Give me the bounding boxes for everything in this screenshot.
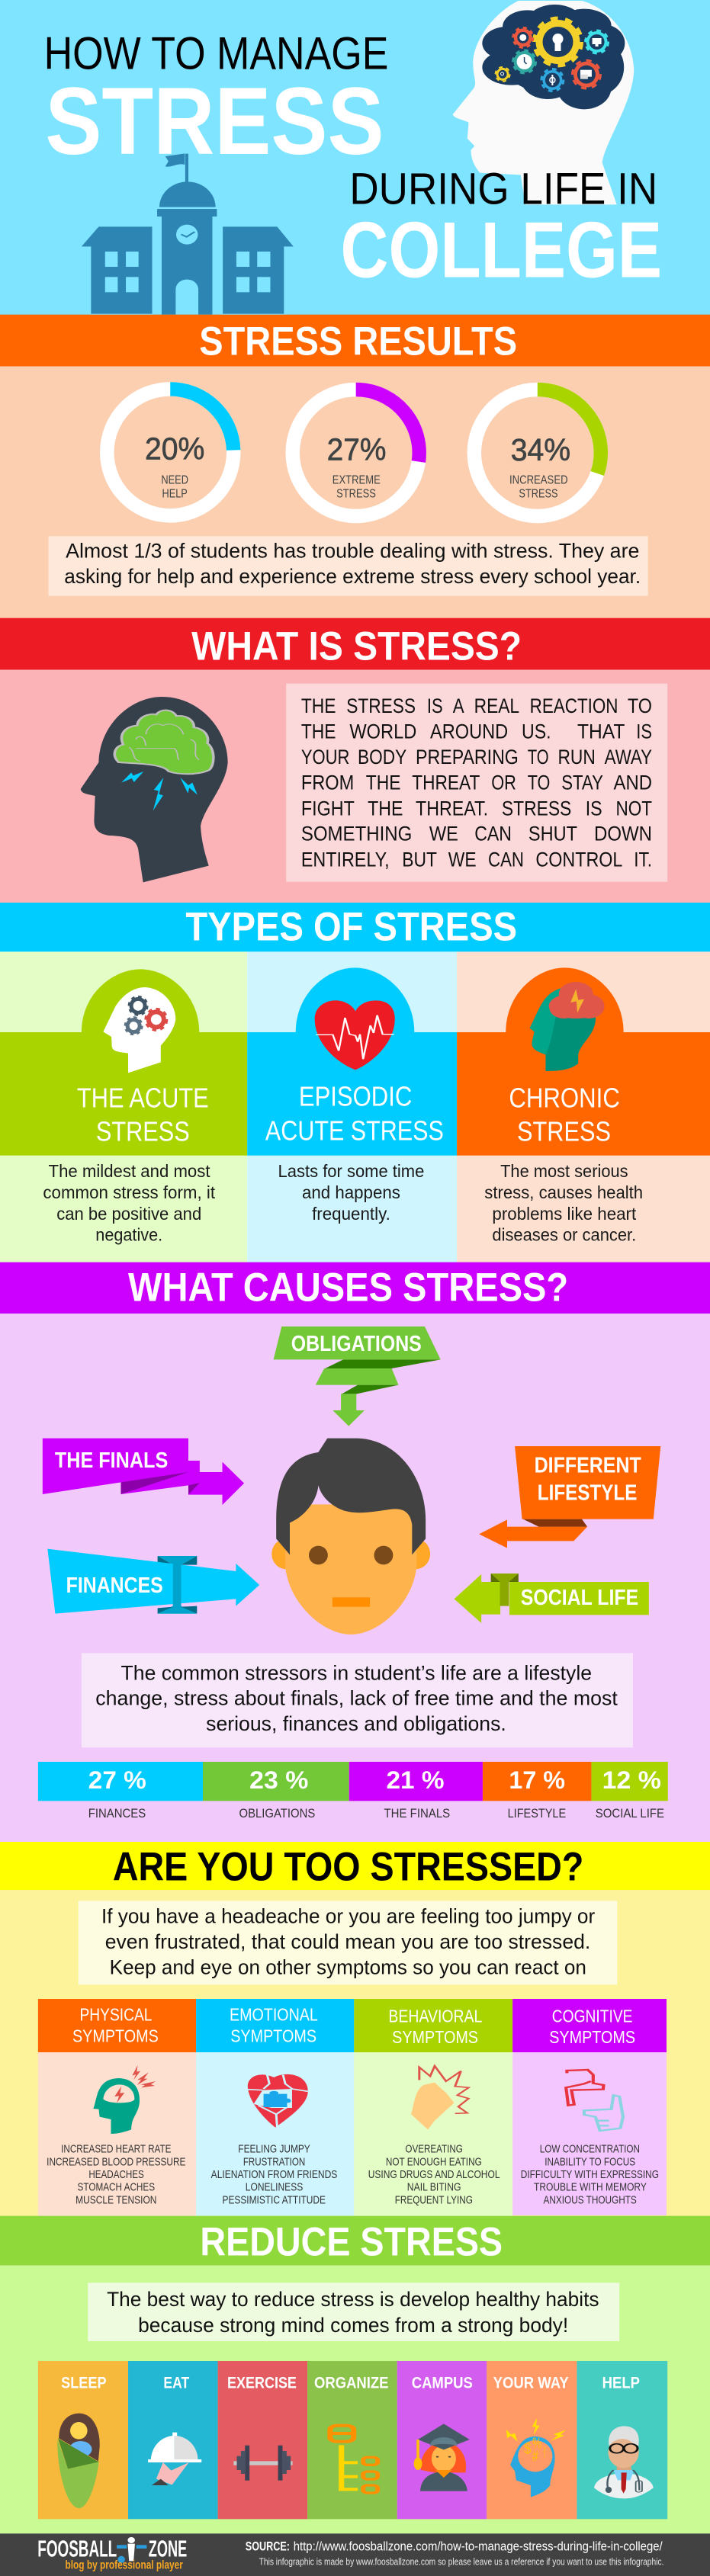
text block: stress definition: WORLD [349,720,416,743]
panel: emotional symptoms: EMOTIONAL [230,2005,318,2025]
chart: 34% increased stress: INCREASED [509,473,568,486]
icon: organization tree [330,2426,377,2493]
text block: stress definition: SOMETHING [301,823,412,845]
panel: behavioral symptoms: USING DRUGS AND ALCOHOL [368,2169,500,2180]
panel: emotional symptoms [196,1999,354,2216]
text block: stress definition: YOUR [301,746,349,768]
tile: sleep [38,2361,128,2519]
chart: stressor share bar: 23 % [249,1766,308,1794]
panel: episodic acute stress [247,967,457,1224]
text block: stress definition: IS [586,797,602,820]
tile: exercise: EXERCISE [227,2373,297,2392]
chart: stressor share bar: THE FINALS [384,1806,450,1821]
footer [0,2533,710,2576]
panel: acute stress [0,969,247,1245]
logo: foosball zone: FOOSBALL [37,2536,117,2562]
text block: stress definition [286,684,667,882]
text block: results summary [49,536,648,596]
text block: stress definition: TO [528,772,550,794]
text block: stress definition: AND [614,772,652,794]
text block: stress definition: STRESS [346,695,416,717]
panel: acute stress: can be positive and [56,1204,201,1224]
chart: stressor share bar: 27 % [88,1766,146,1794]
icon: head with symbols: # [532,2448,538,2465]
chart: 27% extreme stress: EXTREME [333,473,381,486]
text block: stress definition: CAN [488,849,524,871]
tile: your way [487,2361,577,2519]
panel: physical symptoms: PHYSICAL [80,2005,153,2025]
chart: stressor share bar [38,1762,668,1821]
panel: acute stress: The mildest and most [49,1161,210,1181]
text block: source [246,2539,663,2567]
panel: types of stress [0,903,710,1263]
icon: fist with impact [411,2066,469,2129]
chart: 20% need help: NEED [161,473,188,486]
title: stress: STRESS [45,68,384,175]
chart: 34% increased stress: 34% [511,433,570,467]
text block: stress definition: FIGHT [301,797,355,820]
panel: header [0,0,710,315]
panel: episodic acute stress: ACUTE STRESS [265,1115,444,1147]
panel: stressors summary and bar [38,1653,668,1821]
chart: 20% need help: HELP [162,487,188,500]
icon: head with lightning [93,2065,156,2134]
text block: stress definition: THREAT. [416,797,488,820]
icon: puzzle heart [248,2074,308,2128]
text block: stress definition: WE [448,849,477,871]
arrow: finances [47,1549,259,1614]
icon: heart with pulse [315,1000,395,1070]
arrow: obligations [274,1326,441,1426]
panel: episodic acute stress: EPISODIC [299,1082,412,1112]
arrow: finances: FINANCES [66,1573,163,1597]
panel: are you too stressed [0,1842,710,2216]
panel: physical symptoms: HEADACHES [88,2169,144,2180]
chart: 20% need help: 20% [145,432,204,467]
arrow: the finals [43,1439,244,1505]
text block: stress definition: REAL [474,695,519,717]
panel: acute stress: THE ACUTE [77,1083,209,1114]
panel: emotional symptoms: LONELINESS [246,2181,303,2193]
panel: emotional symptoms: FEELING JUMPY [238,2143,310,2155]
icon: head with gears [453,1,634,204]
panel: are you too stressed: INCREASED BLOOD PRESSURE [47,2156,185,2168]
tile: help [577,2361,667,2519]
panel: acute stress: negative. [95,1225,162,1245]
icon: graduate [414,2424,470,2491]
text block: stress definition: BODY [358,746,406,768]
icon: stressed face [271,1439,430,1634]
panel: physical symptoms: MUSCLE TENSION [75,2194,156,2206]
panel: behavioral symptoms: BEHAVIORAL [388,2007,482,2026]
icon: head with gears [103,987,175,1073]
tile: organize [307,2361,397,2519]
icon: dumbbell [233,2446,293,2481]
footer: ZONE [149,2536,187,2562]
panel: behavioral symptoms [354,1999,512,2216]
panel: emotional symptoms: FRUSTRATION [243,2156,305,2168]
text block: stress definition: IS [427,695,443,717]
panel: stress results [0,315,710,618]
chart: 34% increased stress [474,390,601,516]
panel: emotional symptoms: SYMPTOMS [230,2026,316,2045]
chart: 27% extreme stress [293,390,419,516]
text block: stress definition: BUT [402,849,437,871]
chart: 34% increased stress: STRESS [519,487,557,500]
text block: stress definition: US. [522,720,551,743]
text block: stress definition: CONTROL [535,849,622,871]
text block: stress definition: IT. [634,849,652,871]
panel: physical symptoms: STOMACH ACHES [78,2181,155,2193]
panel: physical symptoms: INCREASED HEART RATE [61,2143,171,2155]
panel: emotional symptoms: ALIENATION FROM FRIENDS [211,2169,337,2180]
icon: head with storm cloud [530,982,605,1071]
text block: source: SOURCE: [246,2539,290,2553]
text block: stress definition: STRESS [502,797,571,820]
text block: stress definition: THE [366,772,400,794]
chart: stressor share bar: OBLIGATIONS [239,1806,315,1821]
panel: chronic stress [457,967,710,1245]
text block: stress definition: AWAY [605,746,652,768]
text block: common stressors [82,1653,633,1747]
text block: stress definition: TO [528,746,549,768]
icon: head with symbols: % [532,2435,541,2452]
chart: stressor share bar: 17 % [509,1766,565,1794]
panel: episodic acute stress: and happens [302,1182,400,1202]
panel: physical symptoms: SYMPTOMS [72,2026,159,2045]
icon: sleeping bag [57,2414,100,2508]
icon: head with symbols: $ [524,2440,531,2457]
arrow: the finals: THE FINALS [55,1448,168,1472]
logo: foosball zone [37,2536,187,2571]
text block: stress definition: PREPARING [416,746,519,768]
panel: episodic acute stress: Lasts for some time [278,1161,424,1181]
tile: sleep: SLEEP [61,2373,107,2392]
panel: chronic stress: STRESS [517,1117,611,1147]
panel: physical symptoms [38,1999,196,2216]
text block: stress definition: THAT [577,720,625,743]
text block: stress definition: FROM [301,772,354,794]
panel: behavioral symptoms: SYMPTOMS [392,2027,478,2047]
text block: stress definition: STAY [561,772,603,794]
text block: stress definition: TO [628,695,652,717]
icon: framing hands [566,2070,623,2131]
arrow: obligations: OBLIGATIONS [291,1331,422,1355]
icon: head with brain and lightning [81,697,228,882]
icon: serving cloche [148,2433,201,2485]
panel: cognitive symptoms [512,1999,667,2215]
icon: head with symbols: ! [544,2444,546,2461]
footer: blog by professional player [66,2558,183,2571]
text block: intro [79,1901,617,1984]
text block: stress definition: NOT [616,797,652,820]
panel: acute stress: STRESS [96,1117,190,1147]
chart: 20% need help [107,389,233,515]
tile: help: HELP [602,2373,640,2392]
arrow: different lifestyle [479,1446,660,1548]
panel: episodic acute stress: frequently. [312,1204,390,1224]
tile: eat: EAT [163,2373,189,2392]
text block: stress definition: SHUT [528,823,577,845]
tile: your way: YOUR WAY [493,2373,569,2392]
text block: stress definition: THE [301,720,336,743]
chart: 27% extreme stress: 27% [327,432,386,467]
icon: head with symbols [506,2418,566,2497]
text block: stress definition: A [453,695,464,717]
tile: exercise [218,2361,307,2519]
text block: stress definition: WE [429,823,458,845]
chart: stressor share bar: 12 % [602,1766,661,1794]
icon: doctor [594,2426,654,2498]
panel: behavioral symptoms: FREQUENT LYING [395,2194,473,2206]
chart: stressor share bar: LIFESTYLE [508,1806,566,1821]
text block: stress definition: THREAT [412,772,480,794]
panel: reduce stress [0,2216,710,2576]
panel: what causes stress [0,1262,710,1868]
panel: behavioral symptoms: NAIL BITING [407,2181,461,2193]
tile: organize: ORGANIZE [314,2373,388,2392]
text block: stress definition: AROUND [430,720,508,743]
tile: eat [128,2361,218,2519]
panel: emotional symptoms: PESSIMISTIC ATTITUDE [223,2194,326,2206]
chart: 27% extreme stress: STRESS [336,487,376,500]
panel: acute stress: common stress form, it [43,1182,215,1202]
icon: college building [82,153,294,315]
text block: stress definition: ENTIRELY, [301,849,390,871]
tile: campus [397,2361,487,2519]
text block: stress definition: OR [491,772,516,794]
panel: behavioral symptoms: NOT ENOUGH EATING [386,2156,482,2168]
arrow: social life [455,1574,649,1623]
text block: stress definition: THE [301,695,336,717]
text block: stress definition: DOWN [594,823,652,845]
text block: healthy habits [88,2282,619,2341]
text block: stress definition: CAN [474,823,512,845]
text block: stress definition: IS [636,720,652,743]
tile: campus: CAMPUS [412,2373,473,2392]
chart: stressor share bar: FINANCES [88,1806,146,1821]
text block: stress definition: THE [368,797,403,820]
panel: behavioral symptoms: OVEREATING [405,2143,463,2155]
panel: what is stress [0,618,710,903]
chart: stressor share bar: 21 % [386,1766,444,1794]
text block: stress definition: RUN [558,746,596,768]
